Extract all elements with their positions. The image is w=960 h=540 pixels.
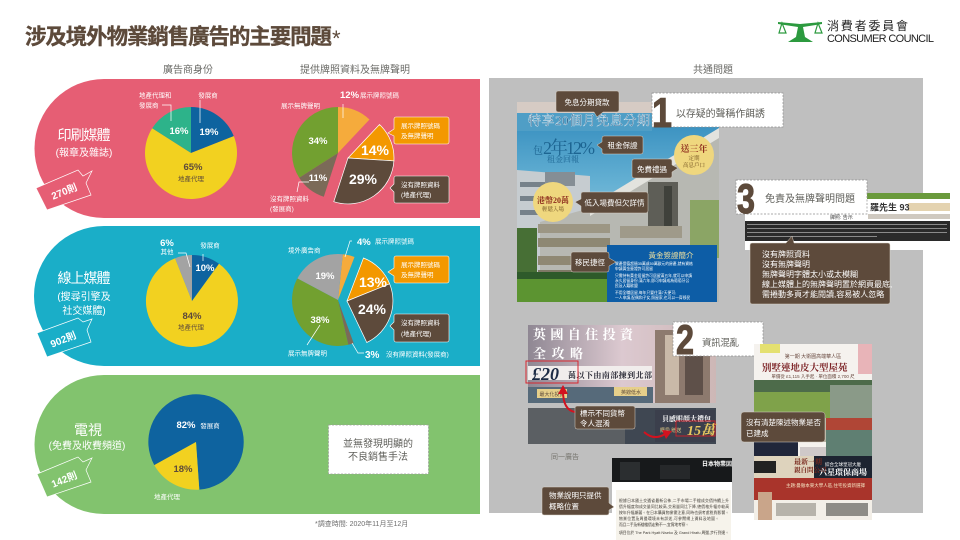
- pie: licence info, online: 13%: [359, 274, 388, 290]
- pie: advertiser identity, television: 18%: [173, 464, 193, 475]
- online media name: (搜尋引擎及: [57, 290, 111, 303]
- ad photo 3: small-print disclaimer: 牌照: 告示: [830, 214, 853, 221]
- callout: unclear whether completed: 已建成: [746, 428, 769, 438]
- pie: licence info, print: 34%: [308, 136, 328, 147]
- callout: no licence info, agents: [390, 314, 449, 342]
- callout: free gift: [632, 159, 678, 178]
- pie: licence info, print: 11%: [309, 173, 328, 184]
- golden visa box: 申請黃金簽證許可居留: [615, 266, 653, 271]
- heading: common problems: 共通問題: [693, 63, 733, 76]
- tag: 902 ads: 902則: [48, 328, 78, 350]
- panel: television: [34, 375, 480, 514]
- golden visa box: 資產價值超過35萬或50萬歐元的房產,就有資格: [615, 261, 693, 266]
- title: *: [332, 26, 341, 51]
- pie: licence info, online: 沒有牌照資料(發展商): [386, 350, 449, 358]
- callout: different currencies confuse: 標示不同貨幣: [580, 408, 625, 418]
- pie: licence info, online: 19%: [315, 271, 335, 282]
- callout: unclear whether completed: 沒有清楚陳述物業是否: [746, 417, 821, 427]
- logo: Consumer Council: [778, 18, 934, 45]
- pie: advertiser identity, print: 65%: [183, 162, 203, 173]
- pie: advertiser identity, online: [146, 238, 238, 347]
- ad photo 2: same ad, mixed currency: 英國自住投資: [533, 327, 634, 342]
- pie: licence info, online: 24%: [358, 301, 387, 317]
- pie: licence info, online: 4%: [357, 237, 371, 248]
- callout: no licence info, agents: [390, 176, 449, 203]
- ad photo 2: same ad, mixed currency: 最大化投資: [539, 391, 565, 398]
- golden visa box: 不用全職居留,每年只要住滿7天便可;: [615, 290, 676, 295]
- callout: only rough location: 概略位置: [549, 501, 579, 511]
- callout: different currencies confuse: [575, 406, 635, 429]
- tag: 902 ads: [37, 318, 92, 357]
- ad photo 4: article with vague location: 項目位於 The Park Hyatt Niseko 及 Grand Hirafu 周邊,步行到達。: [619, 530, 729, 535]
- golden visa box: 只需持有黃金居留許可居留滿五年,就可以申請: [615, 273, 692, 278]
- ad photo 5: villa flyer: 綜合全球皇冠大廈: [825, 461, 861, 468]
- ad photo 2: same ad, mixed currency: [526, 325, 718, 444]
- pie: licence info, online: 境外廣告商: [288, 246, 321, 254]
- pie: advertiser identity, television: 發展商: [200, 421, 220, 430]
- ad photo 3: small-print disclaimer: [745, 193, 950, 250]
- label 2: mixed information: [673, 316, 763, 363]
- pie: advertiser identity, online: 6%: [160, 238, 174, 249]
- callout: rental guarantee: [597, 136, 643, 154]
- badge: three-year rent: 送三年: [680, 143, 708, 154]
- ad photo 2: same ad, mixed currency: 購房 贈送: [660, 427, 681, 434]
- pie: licence info, print: 29%: [349, 171, 378, 187]
- ad photo 4: article with vague location: 價升幅度和成交量同比較高,交易量同比下降,總價格升幅亦較高: [619, 504, 729, 509]
- label 2: mixed information: 2: [676, 316, 694, 363]
- pie: advertiser identity, online: 其他: [160, 247, 174, 256]
- callout: licence and disclaimer shown: 展示牌照號碼: [401, 260, 440, 269]
- ad photo 5: villa flyer: [754, 344, 872, 520]
- pie: advertiser identity, print: 16%: [169, 126, 189, 137]
- ad photo 5: villa flyer: 親自問公司: [794, 465, 827, 474]
- pie: advertiser identity, print: 19%: [199, 127, 219, 138]
- label 3: disclaimer problems: 3: [737, 175, 755, 222]
- golden visa box: 民及入籍歐盟: [615, 283, 638, 288]
- ad photo 2: same ad, mixed currency: 15萬: [687, 423, 718, 439]
- print media name: [56, 127, 112, 159]
- pie: licence info, online: 38%: [310, 315, 330, 326]
- tag: 142 ads: [37, 457, 92, 497]
- badge: three-year rent: 高息户口: [683, 161, 705, 169]
- callout: only rough location: [542, 487, 614, 515]
- pie: licence info, print: 12%: [340, 90, 360, 101]
- heading: licence info and disclaimer: 提供牌照資料及無牌聲明: [300, 63, 410, 76]
- footnote: survey period: *調查時間: 2020年11月至12月: [315, 519, 408, 528]
- tag: 270 ads: 270則: [49, 180, 79, 202]
- pie: licence info, online: 展示牌照號碼: [375, 236, 414, 246]
- online media name: 線上媒體: [58, 270, 110, 286]
- television name: [49, 422, 125, 452]
- callout: free gift: 免費禮遇: [637, 164, 667, 174]
- panel: common problems: [489, 78, 950, 540]
- callout: different currencies confuse: 令人混淆: [580, 418, 610, 428]
- pie: licence info, print: 展示牌照號碼: [360, 90, 400, 100]
- pie: advertiser identity, print: 地產代理: [178, 174, 204, 183]
- ad photo 1: property advertisement: 特享20個月免息分期: [528, 113, 650, 128]
- badge: HK$200k entry: 港幣20萬: [537, 195, 569, 205]
- print media name: 印刷媒體: [58, 127, 110, 143]
- badge: HK$200k entry: 輕鬆入場: [542, 205, 564, 213]
- online media name: [57, 270, 111, 317]
- pie: licence info, online: [288, 236, 449, 361]
- callout: licence and disclaimer shown: 及無牌聲明: [401, 270, 434, 279]
- title: 涉及境外物業銷售廣告的主要問題: [25, 25, 332, 49]
- logo: Consumer Council: CONSUMER COUNCIL: [827, 33, 934, 45]
- pie: licence info, print: (發展商): [270, 204, 294, 213]
- note box: no obvious malpractice: 並無發現明顯的: [343, 437, 413, 450]
- callout: licence and disclaimer shown: 展示牌照號碼: [401, 121, 440, 130]
- pie: advertiser identity, television: 82%: [176, 420, 196, 431]
- ad photo 5: villa flyer: 六星環保商場: [819, 467, 867, 477]
- callout: no licence info, agents: 沒有牌照資料: [401, 180, 440, 189]
- callout: unclear whether completed: [741, 412, 825, 442]
- television name: (免費及收費頻道): [49, 439, 125, 452]
- pie: licence info, print: [270, 90, 449, 213]
- ad photo 2: same ad, mixed currency: £20: [531, 364, 559, 384]
- ad photo 4: article with vague location: 日本物業因: [702, 460, 732, 468]
- callout: licence and disclaimer issues list: 無牌聲明字體太小或太模糊: [762, 269, 858, 279]
- ad photo 2: same ad, mixed currency: 萬以下由南部揀到北部: [568, 370, 652, 380]
- badge: three-year rent: [674, 135, 714, 175]
- pie: advertiser identity, online: 84%: [182, 311, 202, 322]
- ad photo 4: article with vague location: 而且二手及新樓樓價走勢不一,宜實地考察。: [619, 522, 689, 527]
- label 1: dubious claims: 以存疑的聲稱作餌誘: [676, 107, 765, 120]
- label 3: disclaimer problems: [736, 175, 867, 222]
- label 1: dubious claims: [652, 89, 783, 136]
- callout: no licence info, agents: 沒有牌照資料: [401, 318, 440, 327]
- ad photo 5: villa flyer: 第一期 大衛園高端華人區: [785, 353, 841, 360]
- callout: interest-free loan: [556, 91, 619, 117]
- callout: licence and disclaimer issues list: 需捲動多頁才能閱讀,容易被人忽略: [762, 289, 884, 299]
- pie: advertiser identity, print: 地產代理和: [139, 90, 172, 100]
- callout: licence and disclaimer issues list: 沒有無牌聲明: [762, 259, 810, 269]
- ad photo 1: property advertisement: 2年12%: [543, 137, 595, 158]
- ad photo 1: property advertisement: 租金回報: [547, 154, 579, 164]
- ad photo 2: same ad, mixed currency: 全攻略: [533, 346, 583, 361]
- callout: only rough location: 物業說明只提供: [549, 490, 602, 500]
- golden visa box: 一人申請,配偶和子女,照屋家,也可以一齊移民: [615, 295, 691, 300]
- ad photo 5: villa flyer: 單價從 £1,115 入手起 · 單位面積 2,700 尺: [771, 373, 855, 380]
- ad photo 1: property advertisement: [517, 102, 719, 302]
- pie: advertiser identity, print: [139, 90, 237, 199]
- golden visa box: 永久居留身份;滿六年,即可申請成為葡萄牙公: [615, 278, 689, 283]
- pie: licence info, print: 展示無牌聲明: [281, 101, 320, 110]
- pie: advertiser identity, online: 發展商: [200, 240, 220, 250]
- pie: advertiser identity, online: 地產代理: [178, 322, 204, 332]
- callout: no licence info, agents: (地產代理): [401, 329, 431, 338]
- callout: licence and disclaimer issues list: 沒有牌照資料: [762, 249, 810, 259]
- callout: immigration shortcut: 移民捷徑: [575, 257, 605, 267]
- ad photo 3: small-print disclaimer: 羅先生 93: [870, 202, 910, 212]
- callout: licence and disclaimer issues list: 線上媒體上的無牌聲明置於網頁最底,: [762, 279, 892, 289]
- ad photo 4: article with vague location: 按年升幅顯著。在日本購買物業需注意,同時也須考慮稅費影響。: [619, 510, 729, 515]
- print media name: (報章及雜誌): [56, 146, 112, 159]
- badge: three-year rent: 定期: [688, 154, 700, 162]
- ad photo 4: article with vague location: 根據日本國土交通省最新公佈,二手市場二手樓成交價持續上升: [619, 498, 729, 503]
- label 3: disclaimer problems: 免責及無牌聲明問題: [765, 192, 855, 205]
- pie: advertiser identity, television: [148, 394, 244, 501]
- pie: licence info, print: 沒有牌照資料: [270, 194, 310, 203]
- ad photo 5: villa flyer: 主題:曼徹本東大學人區,住宅投資新選擇: [786, 482, 865, 489]
- ad photo 4: article with vague location: [612, 458, 732, 540]
- pie: licence info, online: 3%: [365, 350, 380, 361]
- callout: licence and disclaimer shown: 及無牌聲明: [401, 131, 434, 140]
- note box: no obvious malpractice: [328, 425, 428, 474]
- badge: HK$200k entry: [533, 182, 573, 222]
- logo: Consumer Council: 消費者委員會: [827, 18, 908, 33]
- callout: no licence info, agents: (地產代理): [401, 190, 431, 199]
- ad photo 2: same ad, mixed currency: 貝感眼顏大禮包: [662, 414, 711, 423]
- pie: advertiser identity, print: 發展商: [198, 90, 218, 100]
- callout: low entry fee without details: [575, 192, 648, 213]
- callout: rental guarantee: 租金保證: [608, 140, 638, 150]
- pie: licence info, online: 展示無牌聲明: [288, 348, 328, 358]
- ad photo 1: property advertisement: 包: [533, 144, 543, 157]
- online media name: 社交媒體): [62, 304, 106, 317]
- ad photo 5: villa flyer: 最新一期: [794, 457, 822, 466]
- golden visa box: [607, 245, 717, 302]
- pie: advertiser identity, print: 發展商: [139, 100, 159, 110]
- label 2: mixed information: 資訊混亂: [702, 337, 739, 349]
- label 1: dubious claims: 1: [652, 89, 672, 136]
- tag: 142 ads: 142則: [49, 468, 79, 490]
- golden visa box: 黃金簽證簡介: [648, 250, 694, 260]
- tag: 270 ads: [36, 170, 92, 210]
- heading: advertiser identity: 廣告商身份: [163, 63, 213, 76]
- ad photo 2: same ad, mixed currency: 英鎊低水: [621, 389, 641, 396]
- callout: licence and disclaimer shown: [388, 117, 449, 144]
- callout: licence and disclaimer issues list: [750, 236, 892, 304]
- television name: 電視: [74, 422, 102, 438]
- note box: no obvious malpractice: 不良銷售手法: [348, 450, 408, 463]
- caption: same ad: 同一廣告: [551, 452, 579, 461]
- pie: advertiser identity, television: 地產代理: [154, 492, 180, 501]
- pie: advertiser identity, online: 10%: [195, 263, 215, 274]
- pie: licence info, print: 14%: [361, 142, 390, 158]
- ad photo 5: villa flyer: 別墅連地皮大型屋苑: [762, 362, 848, 374]
- callout: interest-free loan: 免息分期貸款: [564, 97, 610, 107]
- callout: low entry fee without details: 低入場費但欠詳情: [584, 198, 645, 208]
- callout: licence and disclaimer shown: [388, 256, 449, 283]
- ad photo 4: article with vague location: 物業位置及周邊環境未有詳述,可參閱網上資料及地圖。: [619, 516, 719, 521]
- callout: immigration shortcut: [571, 252, 616, 272]
